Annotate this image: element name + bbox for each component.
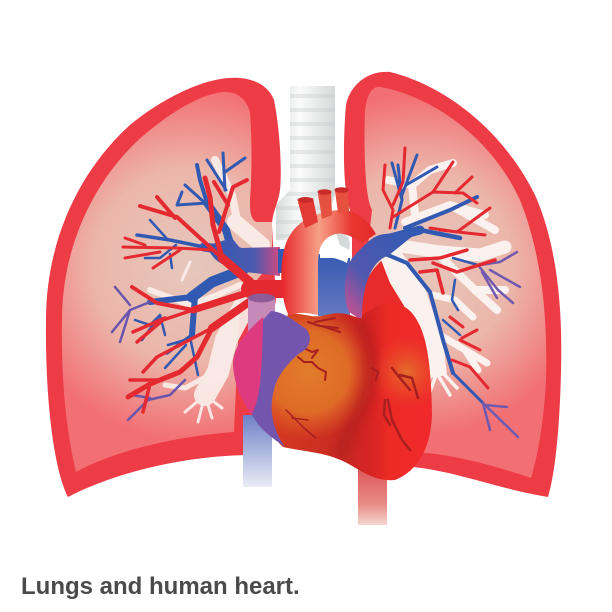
coronary vessels [286, 318, 418, 450]
left lung [46, 78, 281, 497]
pulmonary vessels right (blue) [383, 155, 520, 437]
red chamber beside pulmonary trunk [355, 256, 412, 330]
heart body [272, 305, 432, 480]
pulmonary vessels left (blue) [112, 153, 245, 420]
superior vena cava [248, 294, 275, 352]
aortic branch 1 [298, 198, 318, 228]
blue trunk across mediastinum [205, 238, 320, 276]
central pulmonary trunk [318, 258, 350, 316]
right atrium magenta [233, 317, 270, 416]
right bronchi (white) [378, 163, 505, 397]
inferior vena cava [243, 415, 272, 487]
title: Lungs and human heart. [21, 573, 300, 600]
aortic branch 2 [318, 191, 332, 219]
right atrium purple [252, 311, 310, 447]
arch opening [319, 234, 351, 263]
trachea [276, 86, 335, 240]
pulmonary arteries left (red) [123, 178, 290, 412]
descending aorta [358, 455, 387, 525]
left bronchi (white) [150, 160, 262, 422]
pulmonary trunk right [345, 230, 420, 318]
aorta with branches [281, 187, 376, 316]
right lung [344, 72, 561, 497]
pulmonary arteries right (red) [383, 148, 495, 388]
infographic: lungs and heart [22, 72, 562, 599]
aortic branch 3 [335, 189, 349, 213]
